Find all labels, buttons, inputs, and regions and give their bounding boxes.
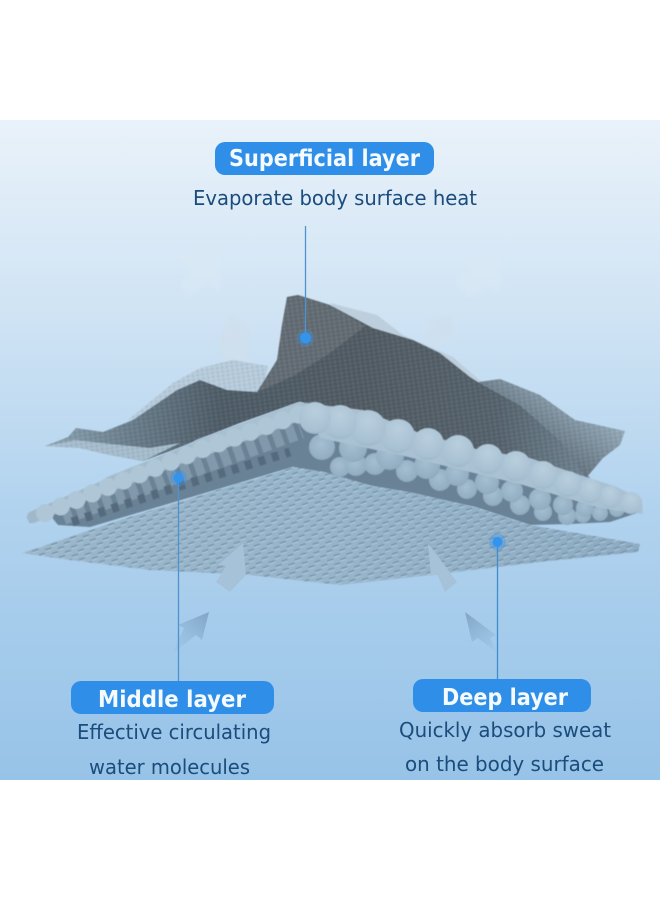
left coil columns <box>62 427 300 513</box>
lighter peak <box>258 295 365 392</box>
right mesh wing <box>478 379 625 478</box>
text: middle description <box>77 720 271 779</box>
background panel <box>0 120 660 780</box>
label: deep layer <box>413 679 591 712</box>
main dark sheet <box>45 295 590 480</box>
label: middle layer: Middle layer <box>98 687 247 713</box>
faint upward arrows above the fabric <box>175 252 500 362</box>
large arrow left <box>216 543 246 592</box>
text: superficial description: Evaporate body surface heat <box>193 186 477 210</box>
third coil row <box>330 453 625 525</box>
label: superficial layer: Superficial layer <box>229 146 421 172</box>
small arrow right <box>465 612 498 654</box>
text: middle description: water molecules <box>89 755 250 779</box>
text: deep description: Quickly absorb sweat <box>399 718 611 742</box>
text: deep description: on the body surface <box>405 752 604 776</box>
top coil band <box>305 403 643 514</box>
second coil row <box>309 434 594 517</box>
top coil row <box>299 402 642 514</box>
back light sheet <box>128 360 268 425</box>
left top coil row <box>33 484 110 517</box>
text: middle description: Effective circulating <box>77 720 271 744</box>
small arrow left <box>172 612 209 654</box>
middle layer: water-circulating coils <box>27 402 643 527</box>
lower pale edge of sheet <box>45 440 180 461</box>
leader line: middle <box>170 470 187 681</box>
leader line: deep <box>489 534 506 679</box>
coil base <box>27 402 640 527</box>
label: middle layer <box>71 681 274 714</box>
deep layer: honeycomb mesh sheet <box>22 467 640 585</box>
leader line: superficial <box>296 226 314 347</box>
superficial fabric layer <box>45 295 625 480</box>
large arrow right <box>428 543 457 592</box>
text: deep description <box>399 718 611 776</box>
arrows rising below the deep layer <box>172 543 498 654</box>
label: deep layer: Deep layer <box>442 685 569 711</box>
